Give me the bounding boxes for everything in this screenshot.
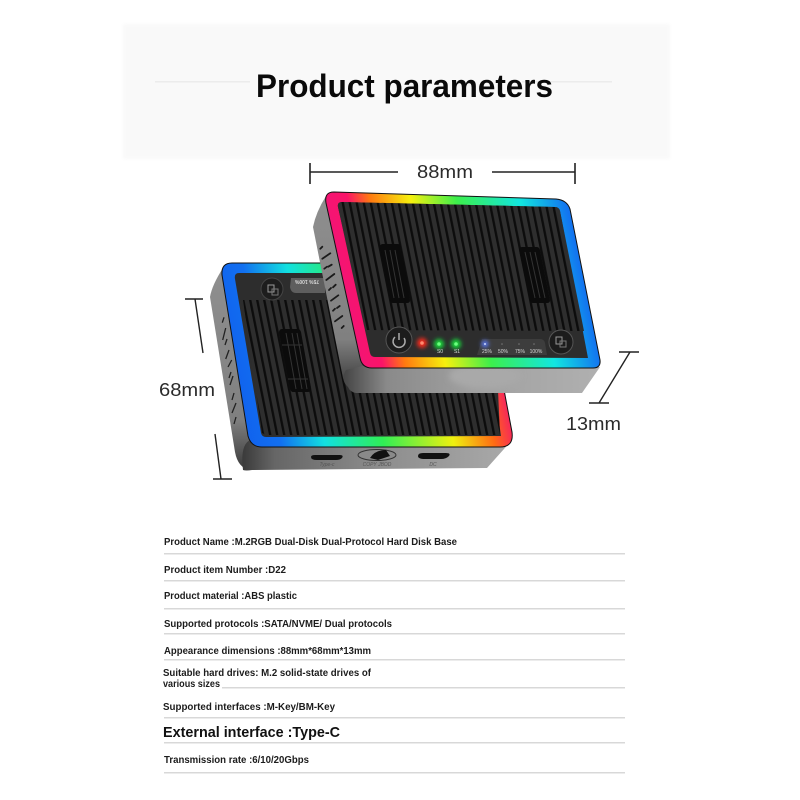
DC port: DC [429, 462, 437, 468]
red power LED [417, 338, 427, 348]
rear device RGB frame [222, 263, 512, 447]
rear device indicator panel [290, 278, 325, 293]
rear device left side [210, 268, 262, 470]
dimension: length 68mm [159, 299, 232, 479]
title panel background [123, 24, 670, 159]
rear product device [210, 263, 512, 470]
S1 indicator [451, 339, 461, 355]
S0 indicator: S0 [437, 349, 443, 355]
front device RGB frame [326, 192, 600, 368]
title: Product parameters [256, 68, 553, 104]
front device side highlight [449, 364, 521, 388]
capacity indicator panel: 50% [498, 349, 509, 355]
capacity indicator panel: 75% [515, 349, 526, 355]
front device left side [313, 196, 372, 387]
spec: external interface: External interface :Type-C [163, 724, 340, 741]
front device vents [320, 247, 344, 328]
rear device front side [242, 440, 512, 470]
front device top face [338, 202, 588, 358]
front product device [313, 192, 600, 393]
rear device vents [222, 317, 236, 424]
rear device indicator panel: 75% 100% [294, 278, 319, 284]
spec: dimensions: Appearance dimensions :88mm*68mm*13mm [164, 646, 371, 657]
spec: protocols: Supported protocols :SATA/NVME/ Dual protocols [164, 619, 392, 630]
spec: transmission rate: Transmission rate :6/10/20Gbps [164, 755, 309, 766]
DC port [418, 453, 450, 468]
dimension: length 68mm: 68mm [159, 380, 215, 400]
power button [386, 327, 412, 353]
front device ribs [338, 202, 584, 331]
rear device ribs [235, 300, 505, 437]
front device right slot [519, 247, 550, 303]
spec: hard drives: Suitable hard drives: M.2 solid-state drives of [163, 668, 372, 679]
dimension: height 13mm: 13mm [566, 414, 621, 434]
dimension: height 13mm [566, 352, 639, 434]
capacity indicator panel: 100% [530, 349, 543, 355]
spec: item number: Product item Number :D22 [164, 565, 286, 576]
dimension: width 88mm [310, 162, 575, 184]
spec: material: Product material :ABS plastic [164, 591, 297, 602]
capacity indicator panel [477, 339, 547, 355]
dimension: width 88mm: 88mm [417, 162, 473, 182]
spec: interfaces: Supported interfaces :M-Key/BM-Key [163, 702, 335, 713]
front device right button [549, 330, 573, 354]
spec: product name: Product Name :M.2RGB Dual-Disk Dual-Protocol Hard Disk Base [164, 537, 457, 548]
spec: hard drives: various sizes [163, 679, 220, 690]
S0 indicator [434, 339, 444, 355]
COPY JBOD switch: COPY JBOD [363, 462, 392, 468]
front device left slot [380, 244, 410, 303]
spec list [163, 537, 625, 774]
Type-C port: Type-c [320, 462, 335, 468]
front device front side [343, 366, 600, 393]
spec: hard drives [163, 668, 625, 690]
COPY JBOD switch [358, 450, 396, 468]
S1 indicator: S1 [454, 349, 460, 355]
rear device button [261, 278, 283, 300]
rear device top face [235, 273, 501, 437]
rear device slot [279, 329, 311, 392]
Type-C port [311, 455, 343, 468]
capacity indicator panel: 25% [482, 349, 493, 355]
